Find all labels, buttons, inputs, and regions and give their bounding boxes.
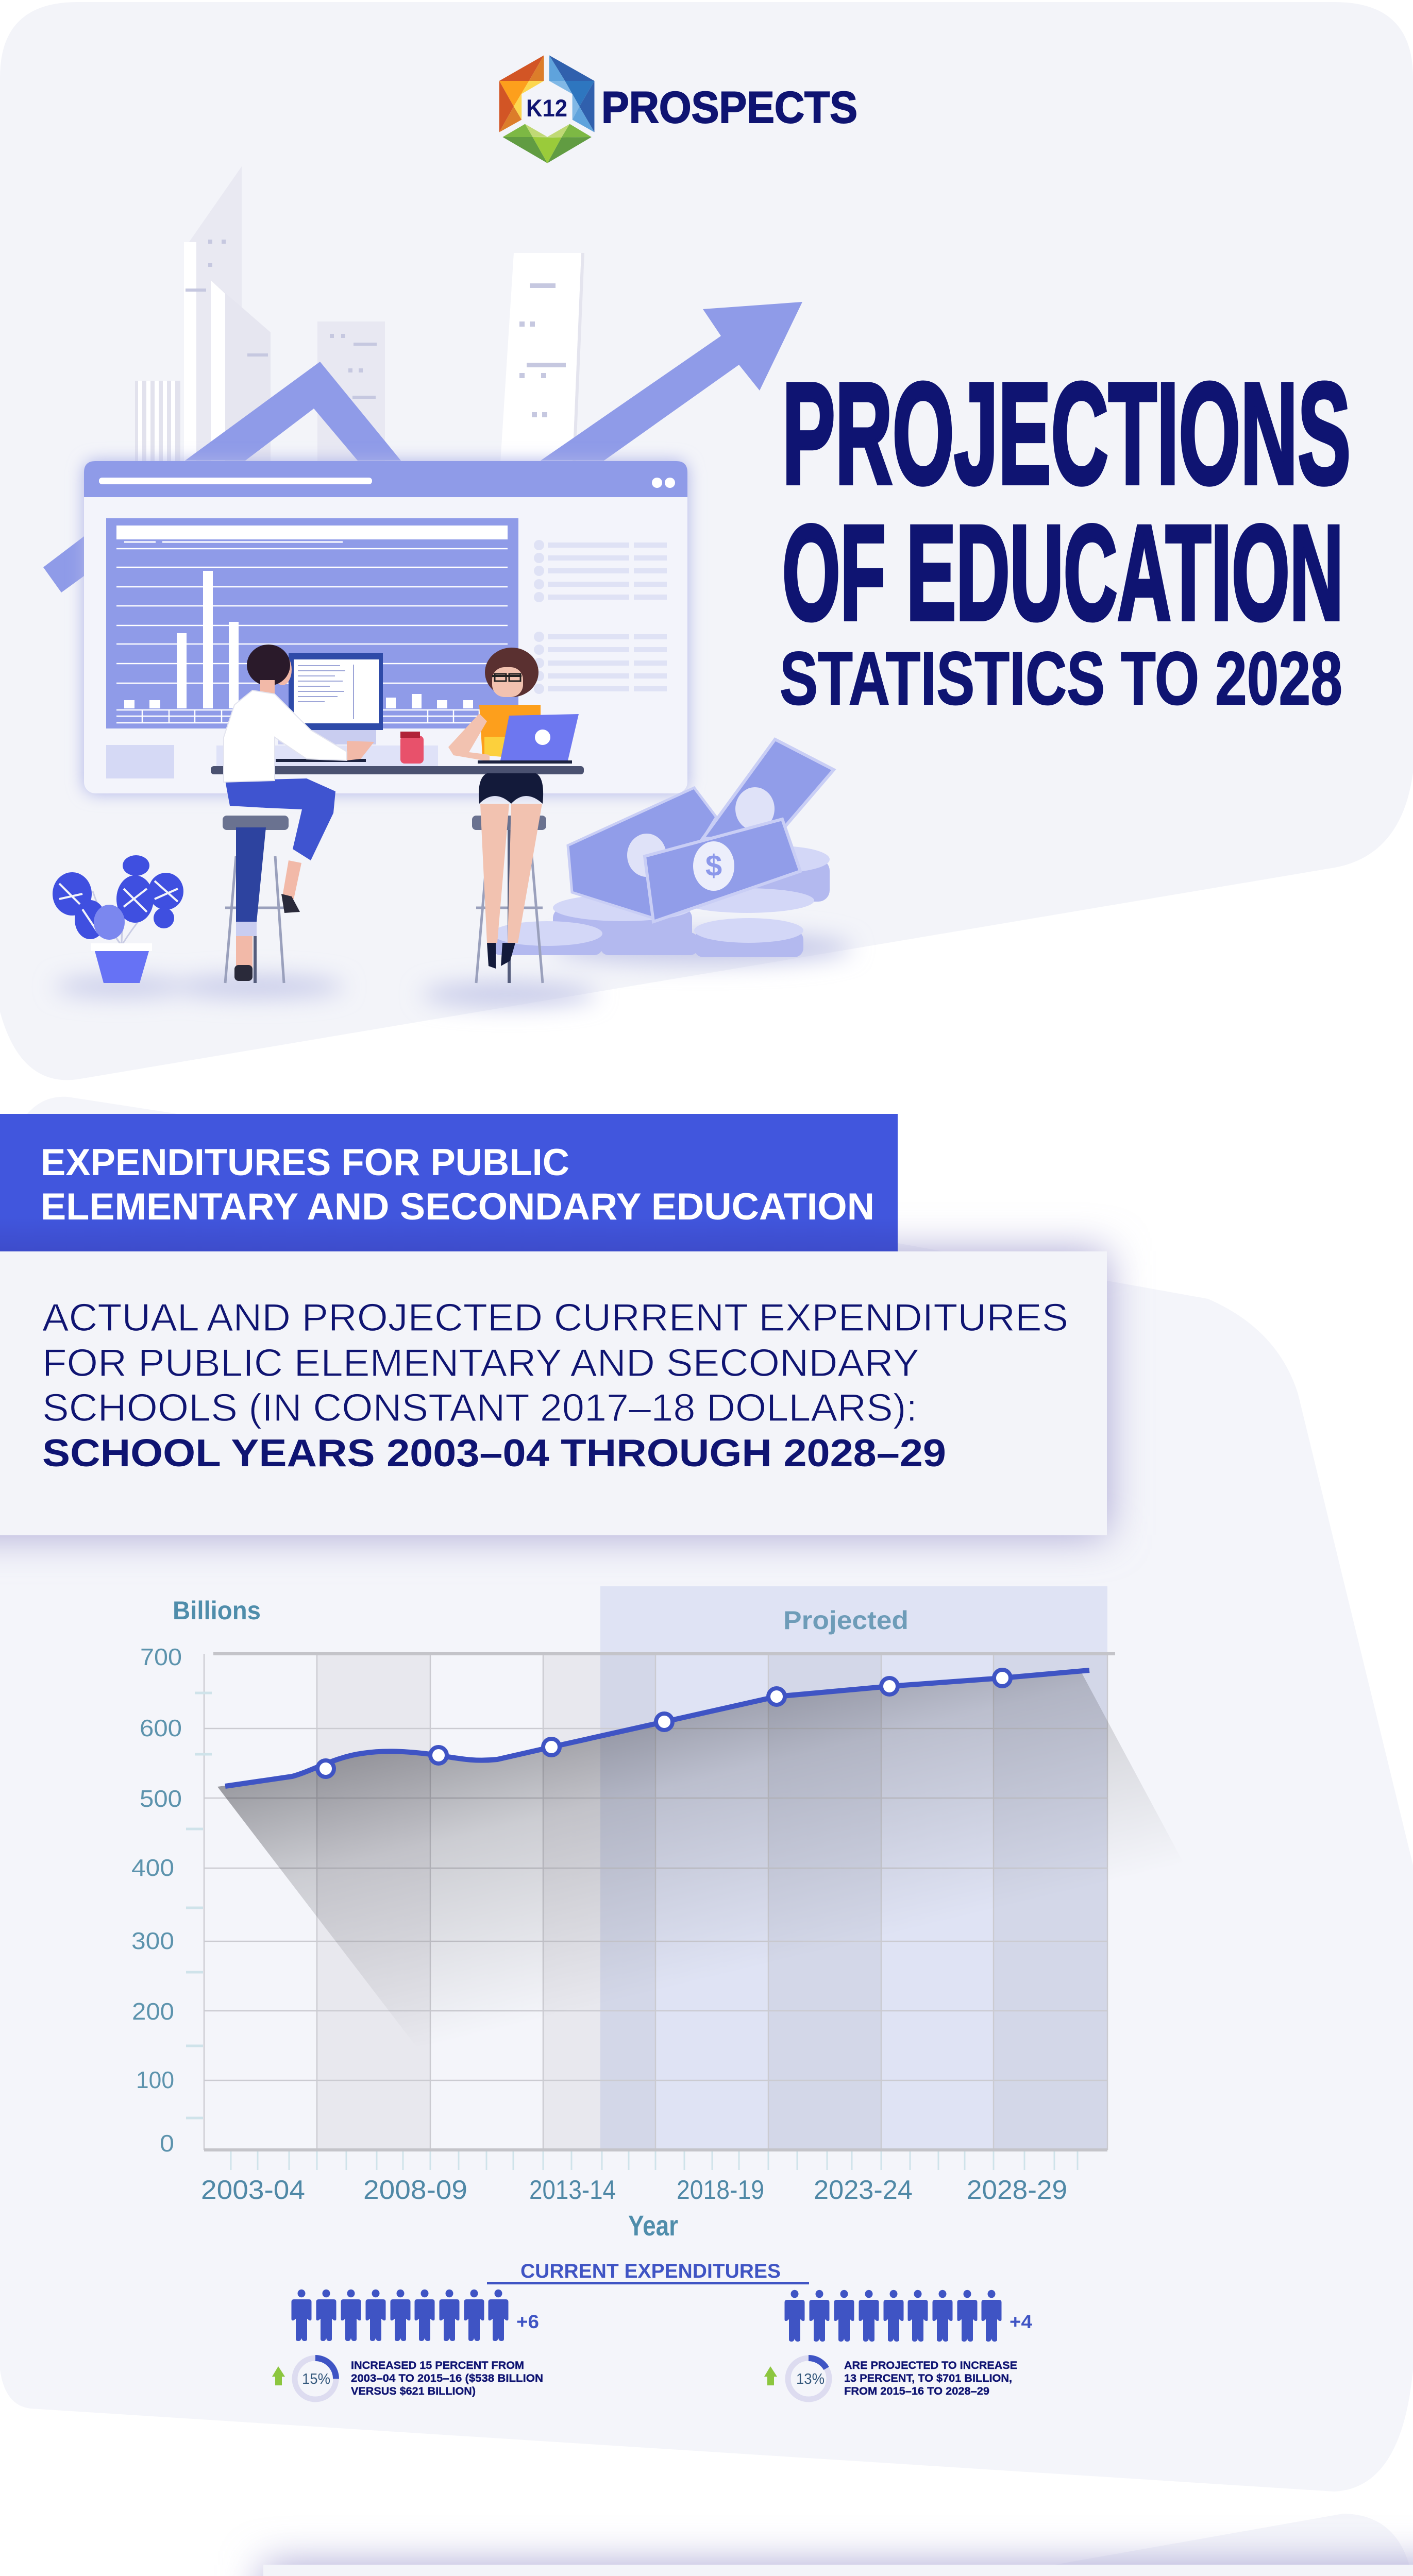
stat: increased 15 percent: VERSUS $621 BILLION) bbox=[351, 2385, 476, 2397]
x axis labels: 2028-29 bbox=[967, 2175, 1067, 2205]
illustration: floor shadows bbox=[55, 933, 852, 1006]
laptop bbox=[478, 714, 579, 764]
illustration: potted plant bbox=[53, 855, 183, 983]
illustration: desk monitor and jar bbox=[211, 653, 584, 774]
y axis labels: 300 bbox=[131, 1927, 174, 1954]
x axis labels: 2023-24 bbox=[814, 2175, 913, 2205]
illustration: money and coins: $ bbox=[705, 849, 722, 883]
callout: chart one title card: ACTUAL AND PROJECTED CURRENT EXPENDITURES bbox=[42, 1296, 1068, 1339]
x axis labels: 2003-04 bbox=[201, 2175, 305, 2205]
section header: expenditures: EXPENDITURES FOR PUBLIC bbox=[41, 1142, 569, 1183]
stat: increased 15 percent bbox=[272, 2358, 543, 2399]
y axis labels: 100 bbox=[136, 2066, 174, 2093]
stats: current expenditures bbox=[272, 2260, 1032, 2399]
stat: projected 13 percent: FROM 2015–16 TO 2028–29 bbox=[844, 2385, 989, 2397]
y axis labels: 200 bbox=[132, 1998, 174, 2025]
logo: K12 Prospects header: PROSPECTS bbox=[601, 83, 857, 132]
y axis labels: 500 bbox=[140, 1785, 182, 1812]
data markers bbox=[317, 1670, 1011, 1777]
x axis labels: 2008-09 bbox=[363, 2175, 467, 2205]
people row: right: +4 bbox=[1010, 2311, 1032, 2332]
illustration: skyline buildings bbox=[135, 166, 584, 463]
stat: increased 15 percent: 15% bbox=[302, 2371, 330, 2387]
chart in window bbox=[106, 518, 518, 728]
callout: chart one title card bbox=[0, 1251, 1107, 1535]
section header: expenditures bbox=[0, 1114, 898, 1251]
stats: current expenditures: CURRENT EXPENDITURES bbox=[520, 2260, 781, 2282]
x axis labels bbox=[201, 2175, 1067, 2205]
callout: chart one title card: FOR PUBLIC ELEMENTARY AND SECONDARY bbox=[42, 1341, 919, 1384]
chart: current expenditures in billions: Billions bbox=[173, 1596, 261, 1625]
stat: projected 13 percent bbox=[764, 2358, 1017, 2399]
people row: left bbox=[292, 2290, 539, 2341]
y axis labels: 600 bbox=[140, 1715, 182, 1741]
section header: expenditures: ELEMENTARY AND SECONDARY EDUCATION bbox=[41, 1186, 874, 1228]
chart: current expenditures in billions: Year bbox=[628, 2209, 678, 2242]
people row: right bbox=[784, 2290, 1032, 2342]
logo: K12 Prospects header bbox=[499, 55, 857, 163]
callout: chart two title card bbox=[263, 2565, 1413, 2576]
illustration: woman with laptop bbox=[448, 648, 579, 969]
logo: K12 Prospects header: K12 bbox=[526, 94, 567, 122]
x axis labels: 2013-14 bbox=[529, 2175, 616, 2205]
panel: per pupil background bbox=[0, 2514, 1413, 2576]
stat: projected 13 percent: ARE PROJECTED TO INCREASE bbox=[844, 2360, 1017, 2371]
callout: chart one title card: SCHOOLS (IN CONSTANT 2017–18 DOLLARS): bbox=[42, 1386, 917, 1429]
stat: projected 13 percent: 13 PERCENT, TO $701 BILLION, bbox=[844, 2372, 1012, 2384]
stat: projected 13 percent: 13% bbox=[796, 2371, 825, 2387]
y axis labels: 0 bbox=[160, 2130, 174, 2157]
chart shadow area bbox=[217, 1672, 1231, 2049]
data line bbox=[225, 1670, 1089, 1786]
y axis labels bbox=[131, 1643, 182, 2157]
stat: increased 15 percent: INCREASED 15 PERCENT FROM bbox=[351, 2360, 524, 2371]
y axis labels: 700 bbox=[140, 1643, 182, 1670]
x axis labels: 2018-19 bbox=[677, 2175, 764, 2205]
people row: left: +6 bbox=[516, 2311, 539, 2332]
illustration: man at desk bbox=[224, 645, 374, 981]
illustration: dashboard window bbox=[84, 461, 687, 793]
callout: chart one title card: SCHOOL YEARS 2003–04 THROUGH 2028–29 bbox=[42, 1431, 946, 1475]
stat: increased 15 percent: 2003–04 TO 2015–16 ($538 BILLION bbox=[351, 2372, 543, 2384]
panel: hero background bbox=[0, 2, 1413, 1080]
chart: current expenditures in billions: Projected bbox=[783, 1606, 909, 1635]
icon: rising arrow bbox=[43, 302, 802, 592]
illustration: stools bbox=[223, 816, 546, 983]
y axis labels: 400 bbox=[131, 1854, 174, 1881]
chart: current expenditures in billions bbox=[131, 1586, 1231, 2242]
panel: expenditures background bbox=[0, 1097, 1413, 2492]
title bbox=[780, 353, 1351, 720]
illustration: money and coins bbox=[492, 739, 834, 957]
list rows in window bbox=[534, 540, 667, 694]
